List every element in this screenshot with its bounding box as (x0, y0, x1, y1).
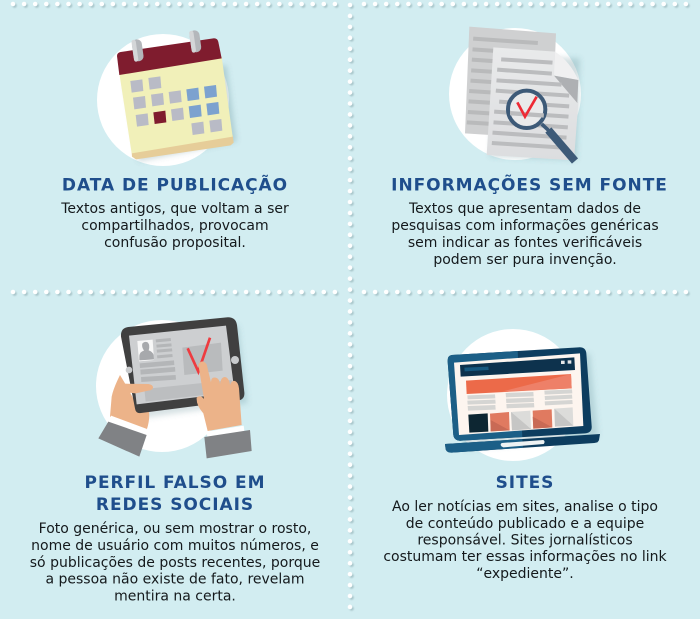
text block: sites: Ao ler notícias em sites, analise o tipo (392, 499, 658, 515)
text block: sites: de conteúdo publicado e a equipe (406, 516, 644, 532)
text block: data de publicação: compartilhados, provocam (81, 218, 269, 234)
icon: laptop (445, 329, 600, 461)
panel: perfil falso em redes sociais (30, 317, 320, 604)
text block: perfil falso (30, 521, 320, 604)
heading: perfil falso em redes sociais (85, 473, 265, 515)
text block: perfil falso: só publicações de posts recentes, porque (30, 555, 320, 571)
text block: data de publicação: confusão proposital. (104, 235, 246, 251)
text block: informações sem fonte: pesquisas com informações genéricas (391, 218, 659, 234)
panel: informações sem fonte (391, 27, 668, 268)
text block: sites: costumam ter essas informações no link (383, 549, 668, 565)
panel: data de publicação (60, 30, 289, 251)
text block: informações sem fonte (391, 201, 659, 268)
text block: perfil falso: mentira na certa. (114, 588, 236, 604)
icon: documents with magnifier (449, 27, 581, 161)
panel: sites (383, 329, 668, 582)
heading: sites: SITES (496, 473, 554, 493)
text block: perfil falso: nome de usuário com muitos números, e (31, 538, 319, 554)
text block: perfil falso: Foto genérica, ou sem mostrar o rosto, (39, 521, 311, 537)
text block: sites: “expediente”. (476, 566, 574, 582)
icon: tablet held by hands (96, 317, 252, 458)
text block: informações sem fonte: podem ser pura invenção. (433, 252, 617, 268)
text block: perfil falso: a pessoa não existe de fato, revelam (45, 572, 305, 588)
heading: perfil falso em redes sociais: PERFIL FALSO EM (85, 473, 265, 493)
icon: calendar (97, 30, 237, 166)
text block: data de publicação (60, 201, 289, 251)
text block: sites: responsável. Sites jornalísticos (417, 532, 633, 548)
text block: sites (383, 499, 668, 582)
text block: informações sem fonte: Textos que apresentam dados de (408, 201, 641, 217)
heading: data de publicação: DATA DE PUBLICAÇÃO (62, 172, 288, 196)
text block: data de publicação: Textos antigos, que voltam a ser (60, 201, 289, 217)
text block: informações sem fonte: sem indicar as fontes verificáveis (408, 235, 642, 251)
heading: perfil falso em redes sociais: REDES SOCIAIS (96, 495, 254, 515)
heading: informações sem fonte: INFORMAÇÕES SEM FONTE (391, 172, 668, 196)
